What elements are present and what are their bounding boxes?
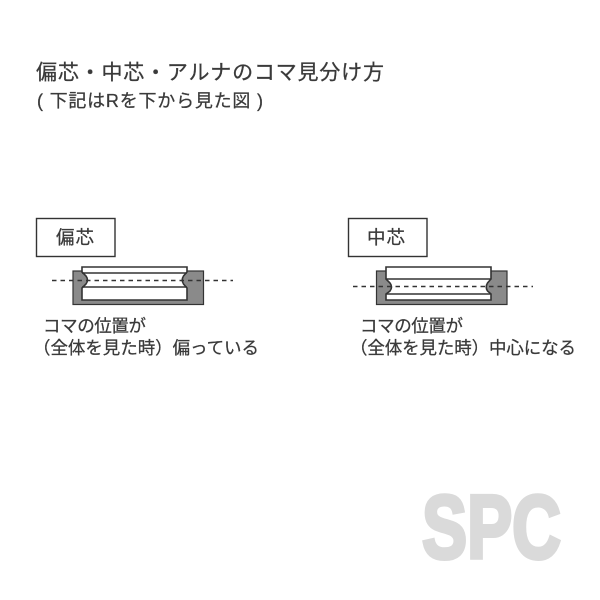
caption: offset core [33, 316, 259, 358]
caption: center core: コマの位置が [360, 316, 464, 336]
caption: offset core: （全体を見た時）偏っている [33, 338, 259, 358]
panel: center core [348, 218, 576, 358]
title: 偏芯・中芯・アルナのコマ見分け方 [36, 62, 384, 84]
diagram: center core cross-section [353, 267, 533, 304]
subtitle: ( 下記はRを下から見た図 ) [37, 91, 263, 111]
diagram: offset core cross-section [52, 267, 233, 304]
label box: offset core: 偏芯 [56, 227, 94, 248]
caption: center core: （全体を見た時）中心になる [350, 338, 576, 358]
label box: offset core [36, 218, 115, 256]
caption: center core [350, 316, 576, 358]
label box: center core: 中芯 [367, 227, 405, 248]
label box: center core [348, 218, 427, 256]
caption: offset core: コマの位置が [43, 316, 146, 336]
panel: offset core [33, 218, 259, 358]
